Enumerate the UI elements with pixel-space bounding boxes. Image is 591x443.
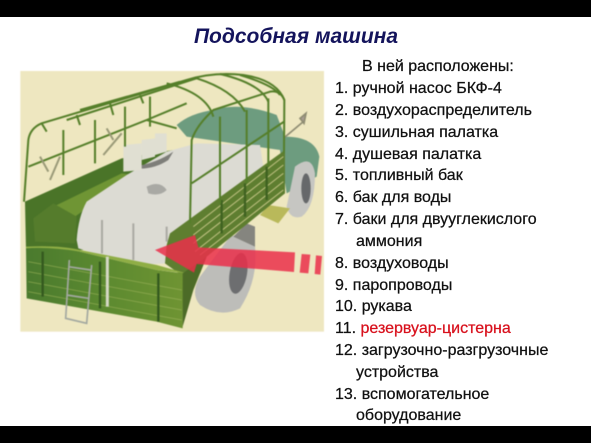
item 7 continuation: аммония [356,233,422,250]
rear wheel [195,223,256,313]
folded stands on canopy wall [40,128,122,180]
item 10: 10. рукава [335,298,412,315]
item 3: 3. сушильная палатка [335,124,498,141]
item 8: 8. воздуховоды [335,255,449,272]
tank seams [102,220,167,260]
red arrow [155,235,322,275]
cab and front wheel [177,107,319,223]
item 1: 1. ручной насос БКФ-4 [335,80,502,97]
item 12: 12. загрузочно-разгрузочные [335,342,548,359]
list heading: В ней расположены: [362,58,514,75]
item 6: 6. бак для воды [335,189,451,206]
bottom black band [0,426,591,443]
title: Подсобная машина [194,25,398,48]
rear tailgate [26,246,207,328]
item 12 continuation: устройства [356,364,438,381]
item 4: 4. душевая палатка [335,146,481,163]
item 13 continuation: оборудование [356,407,461,424]
ammonia tanks [123,133,167,172]
item 2: 2. воздухораспределитель [335,102,532,119]
illustration background [20,71,324,332]
item 9: 9. паропроводы [335,277,452,294]
item 13: 13. вспомогательное [335,386,489,403]
canopy frame [24,74,284,223]
item 11 highlighted: 11. резервуар-цистерна [335,320,511,337]
item 5: 5. топливный бак [335,167,463,184]
top black band [0,0,591,17]
side boards [165,150,285,277]
reservoir tank [77,143,263,265]
floor of truck bed [25,150,173,250]
item 7: 7. баки для двууглекислого [335,211,537,228]
ladder and handle [66,257,107,323]
